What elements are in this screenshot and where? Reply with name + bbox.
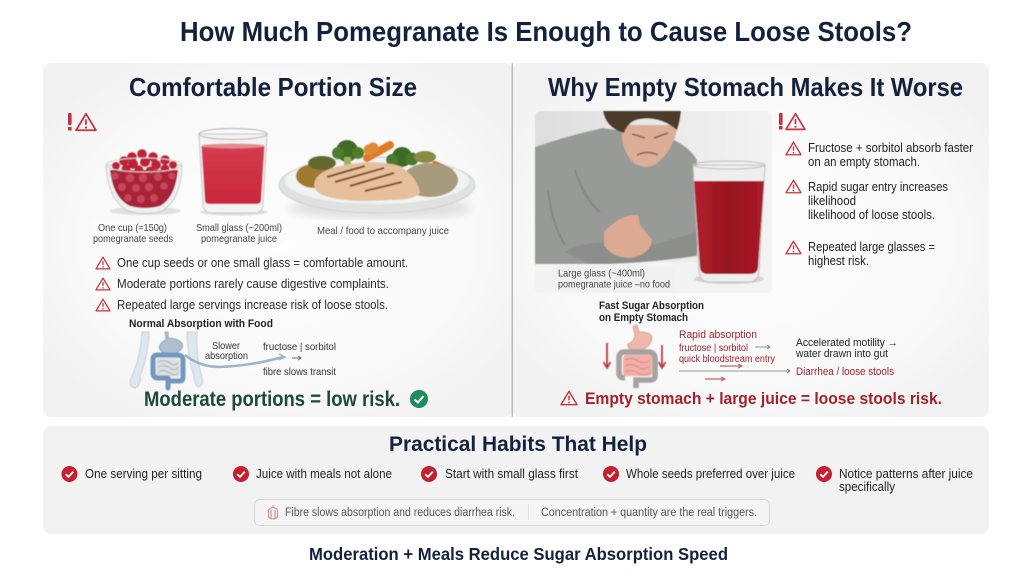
label: slower absorption [205,340,248,362]
label: slower absorption: Slower [212,340,240,352]
caption: glass: pomegranate juice [201,233,277,245]
heading: fast sugar absorption: Fast Sugar Absorption [599,300,704,312]
label: motility: water drawn into gut [795,348,888,360]
bullet list: risk facts: on an empty stomach. [808,155,920,169]
habit: notice patterns: specifically [839,480,896,494]
bullet list: portion facts: One cup seeds or one small glass = comfortable amount. [117,255,408,270]
icon: alert [68,113,96,130]
panel: practical habits [43,426,989,534]
habit: small glass: Start with small glass first [445,467,578,481]
caption: seeds [90,220,177,245]
image: small glass of juice [199,128,268,216]
caption: glass: Small glass (~200ml) [196,222,282,234]
bullet list: risk facts: Repeated large glasses = [808,240,935,254]
footer takeaway: Moderation + Meals Reduce Sugar Absorption Speed [309,544,728,564]
bullet list: risk facts: likelihood of loose stools. [808,208,935,222]
panel: comfortable portion size [43,63,512,417]
icon: alert [779,113,805,130]
heading: practical habits: Practical Habits That Help [389,433,647,456]
bullet list: portion facts: Repeated large servings increase risk of loose stools. [117,297,388,312]
caption: large glass: pomegranate juice –no food [558,278,670,290]
callout: fibre and concentration [254,500,770,526]
label: motility [795,337,898,360]
habit: notice patterns: Notice patterns after juice [839,467,973,481]
caption: glass [192,220,286,245]
heading: why empty stomach: Why Empty Stomach Makes It Worse [548,72,963,102]
caption: meal: Meal / food to accompany juice [317,225,449,237]
bullet list: portion facts [96,255,408,312]
label: fructose and bloodstream [679,343,775,365]
label: rapid absorption: Rapid absorption [679,329,757,341]
icon: warning [561,391,577,405]
arrows: absorption flow [679,345,790,381]
image: bowl of pomegranate seeds [106,149,182,215]
arrow: slow absorption flow [185,354,301,367]
label: motility: Accelerated motility → [796,337,898,349]
callout: fibre and concentration: Concentration + quantity are the real triggers. [541,507,757,519]
bullet list: risk facts: Rapid sugar entry increases [808,180,948,194]
bullet list: risk facts: likelihood [808,194,856,208]
icon: gut [268,505,278,519]
caption: seeds: One cup (≈150g) [98,222,167,234]
caption: large glass [552,266,675,291]
bullet list: portion facts: Moderate portions rarely cause digestive complaints. [117,276,389,291]
heading: fast sugar absorption [599,300,704,324]
habit: notice patterns [816,466,973,494]
label: diarrhea: Diarrhea / loose stools [796,366,894,378]
heading: normal absorption: Normal Absorption with Food [129,318,273,330]
habit: one serving [61,466,202,482]
image: person holding stomach with large juice glass [535,111,772,293]
label: fructose and bloodstream: fructose | sorbitol [679,343,748,354]
image: plate of grilled chicken and vegetables [279,140,475,218]
habit: whole seeds: Whole seeds preferred over juice [626,467,795,481]
heading: comfortable portion size: Comfortable Portion Size [129,72,417,102]
caption: seeds: pomegranate seeds [93,233,173,245]
callout: fibre and concentration: Fibre slows absorption and reduces diarrhea risk. [285,507,515,519]
caption: meal [313,222,453,239]
bullet list: risk facts: Fructose + sorbitol absorb faster [808,141,973,155]
habit: juice with meals: Juice with meals not alone [256,467,392,481]
title: How Much Pomegranate Is Enough to Cause Loose Stools? [180,16,912,47]
heading: fast sugar absorption: on Empty Stomach [599,312,688,324]
caption: large glass: Large glass (~400ml) [558,268,645,280]
label: fibre: fibre slows transit [263,366,336,378]
bullet list: risk facts: highest risk. [808,254,869,268]
habit: one serving: One serving per sitting [85,467,202,481]
icon: green check [410,390,428,408]
label: fructose and bloodstream: quick bloodstream entry [679,354,775,365]
conclusion: low risk: Moderate portions = low risk. [144,388,400,411]
panel: empty stomach [512,63,989,417]
bullet list: risk facts [786,141,973,268]
diagram: digestive tract with food [130,332,203,388]
label: fructose sorbitol: fructose | sorbitol [263,341,336,353]
label: slower absorption: absorption [205,350,248,362]
conclusion: loose stools risk: Empty stomach + large juice = loose stools risk. [585,389,942,408]
diagram: digestive tract empty stomach [604,325,666,388]
